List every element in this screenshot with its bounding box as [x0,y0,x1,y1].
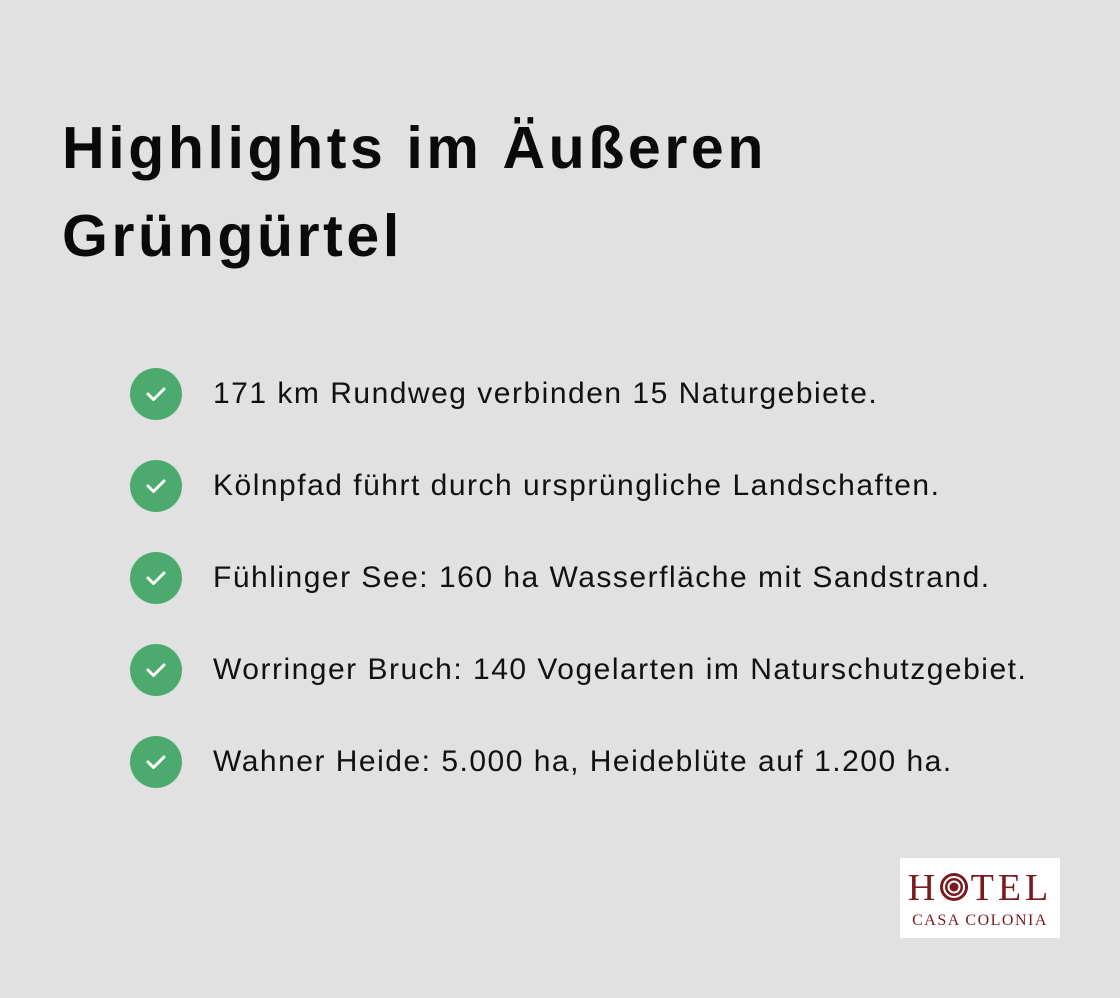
icon: check [130,552,182,604]
text: Worringer Bruch: 140 Vogelarten im Naturschutzgebiet. [213,653,1027,686]
logo: HOTEL [908,867,1052,909]
logo: CASA COLONIA [912,912,1048,929]
icon: check [130,368,182,420]
text: Wahner Heide: 5.000 ha, Heideblüte auf 1.200 ha. [213,745,953,778]
title [62,115,767,269]
item 4 [130,644,1027,696]
item 1 [130,368,878,420]
text: 171 km Rundweg verbinden 15 Naturgebiete. [213,377,878,410]
icon: check [130,644,182,696]
item 2 [130,460,940,512]
title: Highlights im Äußeren [62,115,767,181]
title: Grüngürtel [62,203,403,269]
text: Fühlinger See: 160 ha Wasserfläche mit Sandstrand. [213,561,991,594]
logo [900,858,1060,938]
icon: check [130,736,182,788]
text: Kölnpfad führt durch ursprüngliche Landschaften. [213,469,940,502]
item 5 [130,736,953,788]
item 3 [130,552,991,604]
icon: check [130,460,182,512]
